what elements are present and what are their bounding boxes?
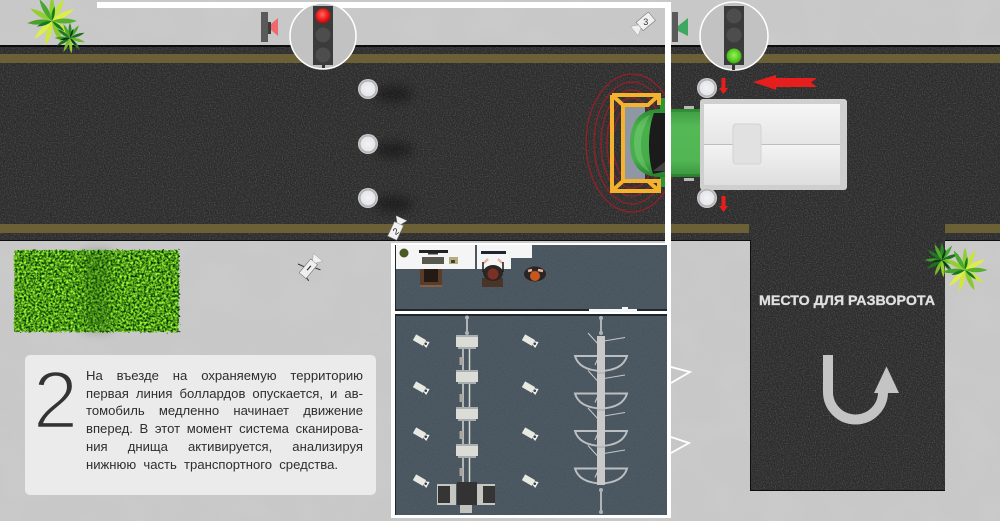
- plant: turning pad: [924, 242, 988, 292]
- operator seated: [482, 259, 503, 287]
- cameras: left column: [413, 334, 430, 488]
- barrier signal: red: [261, 12, 278, 42]
- gate line with scanners: [456, 316, 478, 482]
- arrow: bollard down upper: [719, 78, 728, 94]
- step number: 2: [33, 355, 78, 445]
- road markings: yellow lane lines: [0, 54, 1000, 233]
- step description: нижнюю часть транспортного средства.: [86, 457, 338, 472]
- step description: [86, 368, 363, 472]
- arrow: traffic direction: [753, 75, 817, 90]
- panel: checkpoint plan: [395, 314, 667, 515]
- underbody scan waves: [586, 74, 678, 212]
- desk equipment: [400, 248, 506, 264]
- plant: top left: [27, 0, 85, 54]
- step description: На въезде на охраняемую территорию: [86, 368, 363, 383]
- step description: вперед. В этот момент система сканирова-: [86, 421, 363, 436]
- cameras: middle column: [522, 334, 539, 488]
- desk surfaces: [396, 245, 637, 312]
- step description: первая линия боллардов опускается, и ав-: [86, 386, 363, 401]
- camera 2: 2: [391, 226, 401, 237]
- traffic light: green: [700, 2, 768, 70]
- step description: ния днища активируется, анализируя: [86, 439, 363, 454]
- barrier signal: green: [672, 12, 688, 42]
- heading: turning area: МЕСТО ДЛЯ РАЗВОРОТА: [759, 292, 935, 308]
- bollard row: raised first line: [358, 79, 413, 212]
- arrow: bollard down lower: [719, 196, 728, 212]
- green car: [630, 98, 702, 187]
- wedge bowls on spine: [575, 316, 627, 514]
- guard standing: [524, 266, 546, 282]
- scanner plate: [625, 105, 645, 181]
- small white markers beside frame: [671, 367, 690, 453]
- icon: u-turn arrow: [828, 355, 899, 419]
- camera 2: [387, 216, 407, 241]
- camera 3: [630, 12, 656, 36]
- text card: step 2: [25, 355, 376, 495]
- traffic light: red: [290, 3, 356, 69]
- step description: томобиль медленно начинает движение: [86, 403, 363, 418]
- barrier base: [437, 482, 495, 513]
- chair: empty: [420, 269, 442, 287]
- white inspection frame: [97, 2, 671, 518]
- camera 3: 3: [643, 17, 648, 27]
- bollards: lowering pair: [697, 78, 717, 208]
- camera 1: [294, 250, 326, 282]
- panel: control room: [395, 245, 667, 312]
- truck: [700, 99, 847, 190]
- grass patch: [14, 250, 179, 332]
- scanner frame: yellow: [612, 95, 659, 191]
